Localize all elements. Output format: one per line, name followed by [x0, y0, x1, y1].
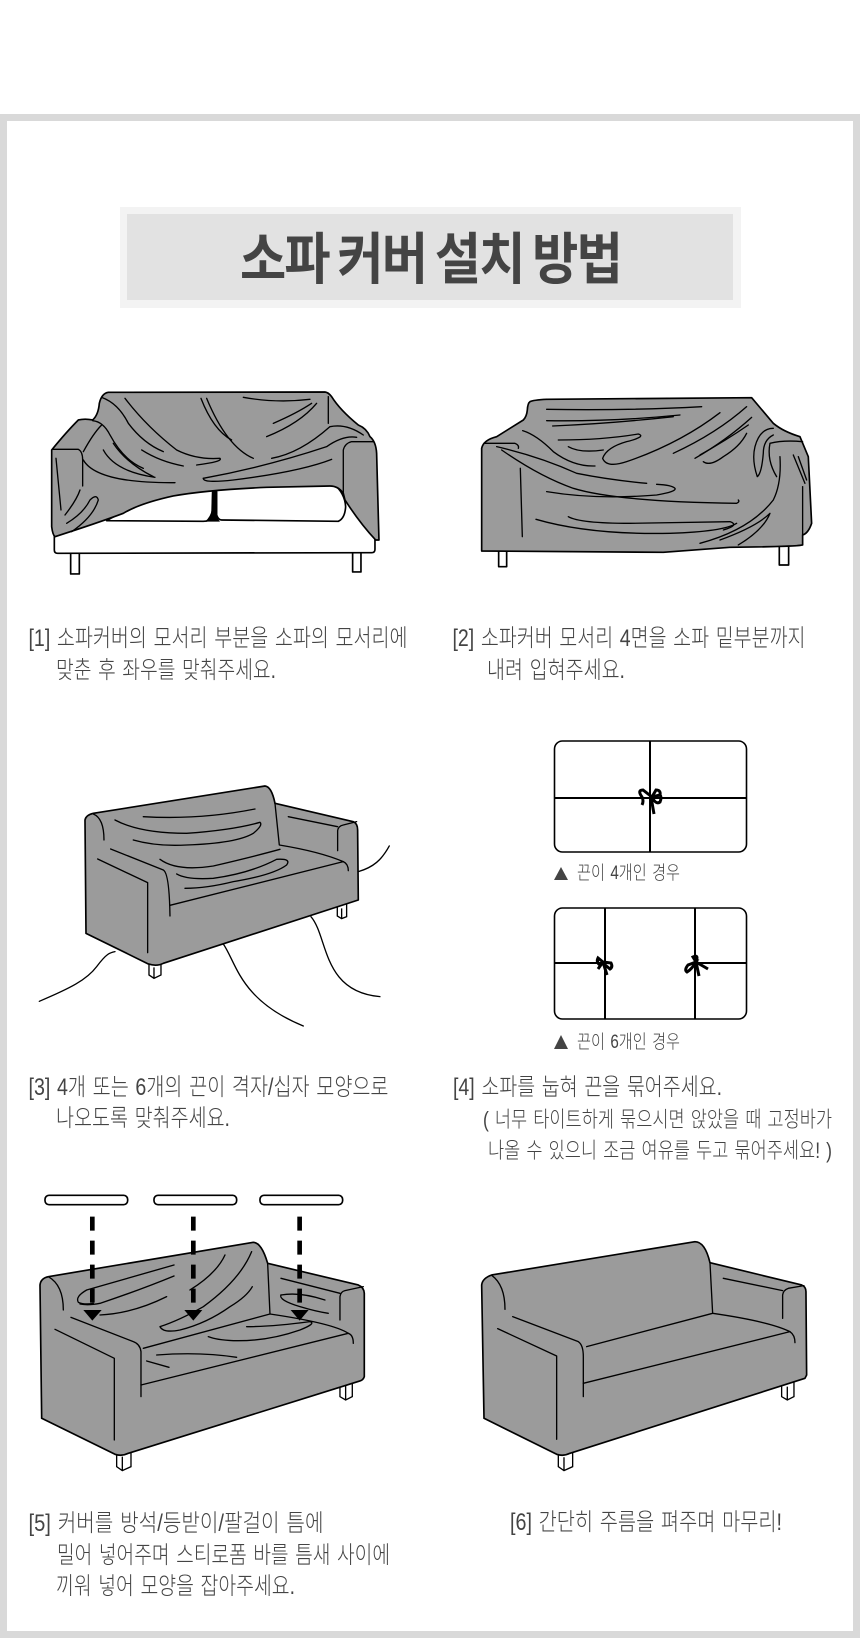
diagram: 6 strings [554, 908, 746, 1019]
step 3 text [28, 1074, 388, 1132]
panel: step 5 [28, 1195, 390, 1600]
step 1 text: [1] 소파커버의 모서리 부분을 소파의 모서리에 [28, 625, 408, 652]
step 4 text [453, 1074, 832, 1163]
panel: step 3 [28, 786, 389, 1132]
step 4 text: [4] 소파를 눕혀 끈을 묶어주세요. [453, 1074, 722, 1101]
step 3 text: [3] 4개 또는 6개의 끈이 격자/십자 모양으로 [28, 1074, 388, 1101]
panel: step 4 [453, 741, 832, 1163]
step 2 text [452, 625, 806, 684]
title banner [120, 207, 741, 308]
caption: 4 strings: 끈이 4개인 경우 [577, 862, 680, 884]
caption: 6 strings: 끈이 6개인 경우 [577, 1031, 680, 1053]
step 5 text: 끼워 넣어 모양을 잡아주세요. [56, 1573, 295, 1600]
title: 소파 커버 설치 방법 [240, 228, 621, 291]
step 1 text: 맞춘 후 좌우를 맞춰주세요. [56, 657, 276, 684]
illustration: finished sofa [482, 1242, 807, 1471]
step 1 text [28, 625, 408, 684]
step 5 text: 밀어 넣어주며 스티로폼 바를 틈새 사이에 [57, 1542, 390, 1569]
step 3 text: 나오도록 맞춰주세요. [56, 1105, 230, 1132]
arrow: left [83, 1217, 102, 1321]
caption: 6 strings [554, 1031, 680, 1053]
step 5 text [28, 1510, 390, 1600]
panel: step 1 [28, 392, 408, 684]
arrow: right [291, 1217, 309, 1321]
illustration: sofa with strings [39, 786, 389, 1026]
step 2 text: 내려 입혀주세요. [487, 657, 625, 684]
icon: foam bars [45, 1195, 343, 1205]
diagram: 4 strings [554, 741, 746, 852]
panel: step 6 [482, 1242, 807, 1536]
caption: 4 strings [554, 862, 680, 884]
step 6 text: [6] 간단히 주름을 펴주며 마무리! [510, 1509, 782, 1536]
step 5 text: [5] 커버를 방석/등받이/팔걸이 틈에 [28, 1510, 324, 1537]
illustration: sofa with cover draped on top [52, 392, 379, 574]
panel: step 2 [452, 398, 812, 684]
illustration: foam bars inserted into gaps [40, 1195, 364, 1471]
arrow: middle [184, 1217, 202, 1321]
illustration: sofa fully covered [482, 398, 812, 567]
